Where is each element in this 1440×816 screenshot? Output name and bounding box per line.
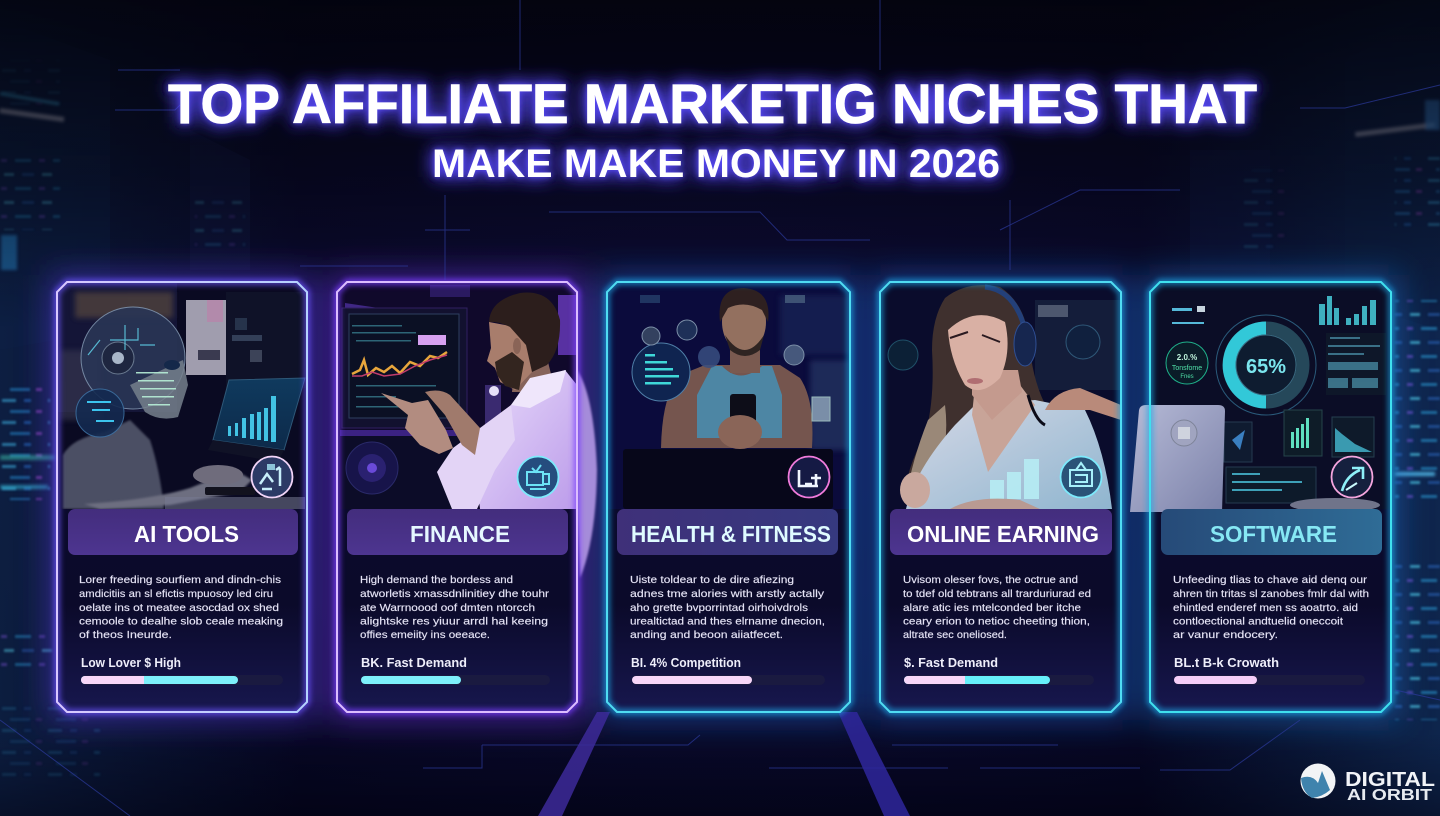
laptop overlapping card edge (1130, 405, 1225, 512)
description: High demand the bordess and (360, 574, 513, 586)
description: ate Warrnoood oof dmten ntorcch (360, 602, 535, 614)
illustration: fit man with phone (607, 282, 850, 509)
holo (632, 343, 690, 401)
logo: Digital AI Orbit: DIGITAL (1345, 769, 1435, 791)
metric: $. Fast Demand (904, 656, 998, 670)
panel: Finance (337, 282, 597, 712)
logo: Digital AI Orbit (1300, 764, 1435, 804)
back hand and forearm (425, 391, 480, 455)
torso and shirt (474, 370, 577, 509)
header: Finance (347, 509, 568, 555)
description: Unfeeding tlias to chave aid denq our (1173, 574, 1368, 586)
metric (904, 656, 1094, 685)
head: neck, face, hair, beard (512, 363, 551, 392)
front hand and forearm (381, 393, 453, 454)
description: altrate sec oneliosed. (903, 629, 1007, 641)
header: AI Tools: AI TOOLS (134, 521, 239, 547)
metric: Low Lover $ High (81, 656, 181, 670)
description: oelate ins ot meatee asocdad ox shed (79, 602, 279, 614)
description: atworletis xmassdnlinitiey dhe touhr (360, 588, 550, 600)
title: TOP AFFILIATE MARKETIG NICHES THAT (168, 72, 1257, 135)
border (337, 282, 577, 712)
header: Health & Fitness (617, 509, 838, 555)
description (903, 574, 1091, 641)
description: alightske res yiuur arrdl hal keeing (360, 616, 548, 628)
subtitle: MAKE MAKE MONEY IN 2026 (432, 142, 1000, 186)
border (880, 282, 1121, 712)
shirt overflow (577, 370, 597, 578)
description: alare atic ies mtelconded ber itche (903, 602, 1081, 614)
description: amdicitiis an sl efictis mpuosoy led ciru (79, 588, 273, 600)
header: Health & Fitness: HEALTH & FITNESS (631, 521, 831, 547)
donut gauge (1216, 315, 1316, 415)
panel: Software (1130, 282, 1391, 712)
hair (908, 285, 1044, 474)
header: AI Tools (68, 509, 298, 555)
description: aho grette bvporrintad oirhoivdrols (630, 602, 808, 614)
header: Online Earning (890, 509, 1112, 555)
description: adnes tme alories with arstly actally (630, 588, 825, 600)
body (63, 420, 164, 509)
header: Finance: FINANCE (410, 521, 510, 547)
hand (193, 465, 243, 485)
icon badge (518, 456, 558, 498)
metric: BK. Fast Demand (361, 656, 467, 670)
head (81, 307, 185, 409)
description (1173, 574, 1369, 641)
title: TOP AFFILIATE MARKETIG NICHES THAT (168, 72, 1257, 135)
description: anding and beoon aiiatfecet. (630, 629, 783, 641)
metric (81, 656, 283, 685)
laptop (623, 449, 833, 509)
border (57, 282, 307, 712)
illustration: woman with headset (880, 282, 1121, 509)
description: ceary erion to netioc cheeting thion, (903, 616, 1090, 628)
description: to tdef old tebtrans all trarduriurad ed (903, 588, 1091, 600)
description (360, 574, 550, 641)
panel: Online Earning (880, 282, 1121, 712)
description: Uiste toldear to de dire afiezing (630, 574, 794, 586)
metric (631, 656, 825, 685)
logo: Digital AI Orbit: AI ORBIT (1347, 787, 1432, 804)
border (1150, 282, 1391, 712)
icon badge (1060, 456, 1102, 498)
illustration: software dashboard: Tonsfome (1172, 365, 1202, 372)
metric (361, 656, 550, 685)
description (79, 574, 283, 641)
metric: BL.t B-k Crowath (1174, 656, 1279, 670)
description: ahren tin tritas sl zanobes fmlr dal with (1173, 588, 1369, 600)
icon badge (788, 456, 830, 498)
torso (661, 365, 812, 448)
panel: Health & Fitness (607, 282, 850, 712)
laptop (213, 378, 305, 450)
description (630, 574, 825, 641)
header: Software: SOFTWARE (1210, 521, 1337, 547)
icon badge (1332, 456, 1372, 498)
illustration: man at trading screen (337, 282, 577, 509)
green circle (1166, 342, 1208, 384)
ambient glow behind cards (50, 275, 1399, 720)
description: urealtictad and thes elrname dnecion, (630, 616, 825, 628)
description: contloectional andtuelid oneccoit (1173, 616, 1343, 628)
hand on shoulder (1045, 388, 1121, 420)
description: cemoole to dealhe slob ceale meaking (79, 616, 283, 628)
description: Uvisom oleser fovs, the octrue and (903, 574, 1078, 586)
header: Online Earning: ONLINE EARNING (907, 521, 1099, 547)
floor lines (538, 712, 610, 816)
chart bars (990, 459, 1039, 499)
collar (511, 370, 566, 408)
phone & hands (730, 394, 756, 420)
illustration: software dashboard: 65% (1246, 356, 1286, 378)
header: Software (1161, 509, 1382, 555)
holo circle (76, 389, 124, 437)
description: Lorer freeding sourfiem and dindn-chis (79, 574, 281, 586)
front sleeve (437, 405, 515, 509)
description: offies emeiity ins oeeace. (360, 629, 490, 641)
description: of theos Ineurde. (79, 629, 172, 641)
border (607, 282, 850, 712)
top-left label (1172, 308, 1204, 324)
illustration: software dashboard (1150, 282, 1391, 512)
shirt (906, 400, 1112, 509)
top right bars (1319, 296, 1376, 325)
illustration: software dashboard: Fnes (1180, 374, 1194, 380)
subtitle: MAKE MAKE MONEY IN 2026 (432, 142, 1000, 186)
description: ar vanur endocery. (1173, 629, 1278, 641)
hand at bottom (900, 472, 930, 508)
icon badge (252, 456, 292, 498)
metric (1174, 656, 1365, 685)
neck/face (972, 370, 1022, 420)
illustration: AI robot at laptop (57, 282, 307, 509)
headset (985, 287, 1025, 330)
metric: BI. 4% Competition (631, 656, 741, 670)
description: ehintled enderef men ss aoatrto. aid (1173, 602, 1358, 614)
panel: AI Tools (57, 282, 307, 712)
mini widgets (1224, 422, 1252, 462)
illustration: software dashboard: 2.0.% (1177, 353, 1197, 362)
head (730, 350, 760, 373)
